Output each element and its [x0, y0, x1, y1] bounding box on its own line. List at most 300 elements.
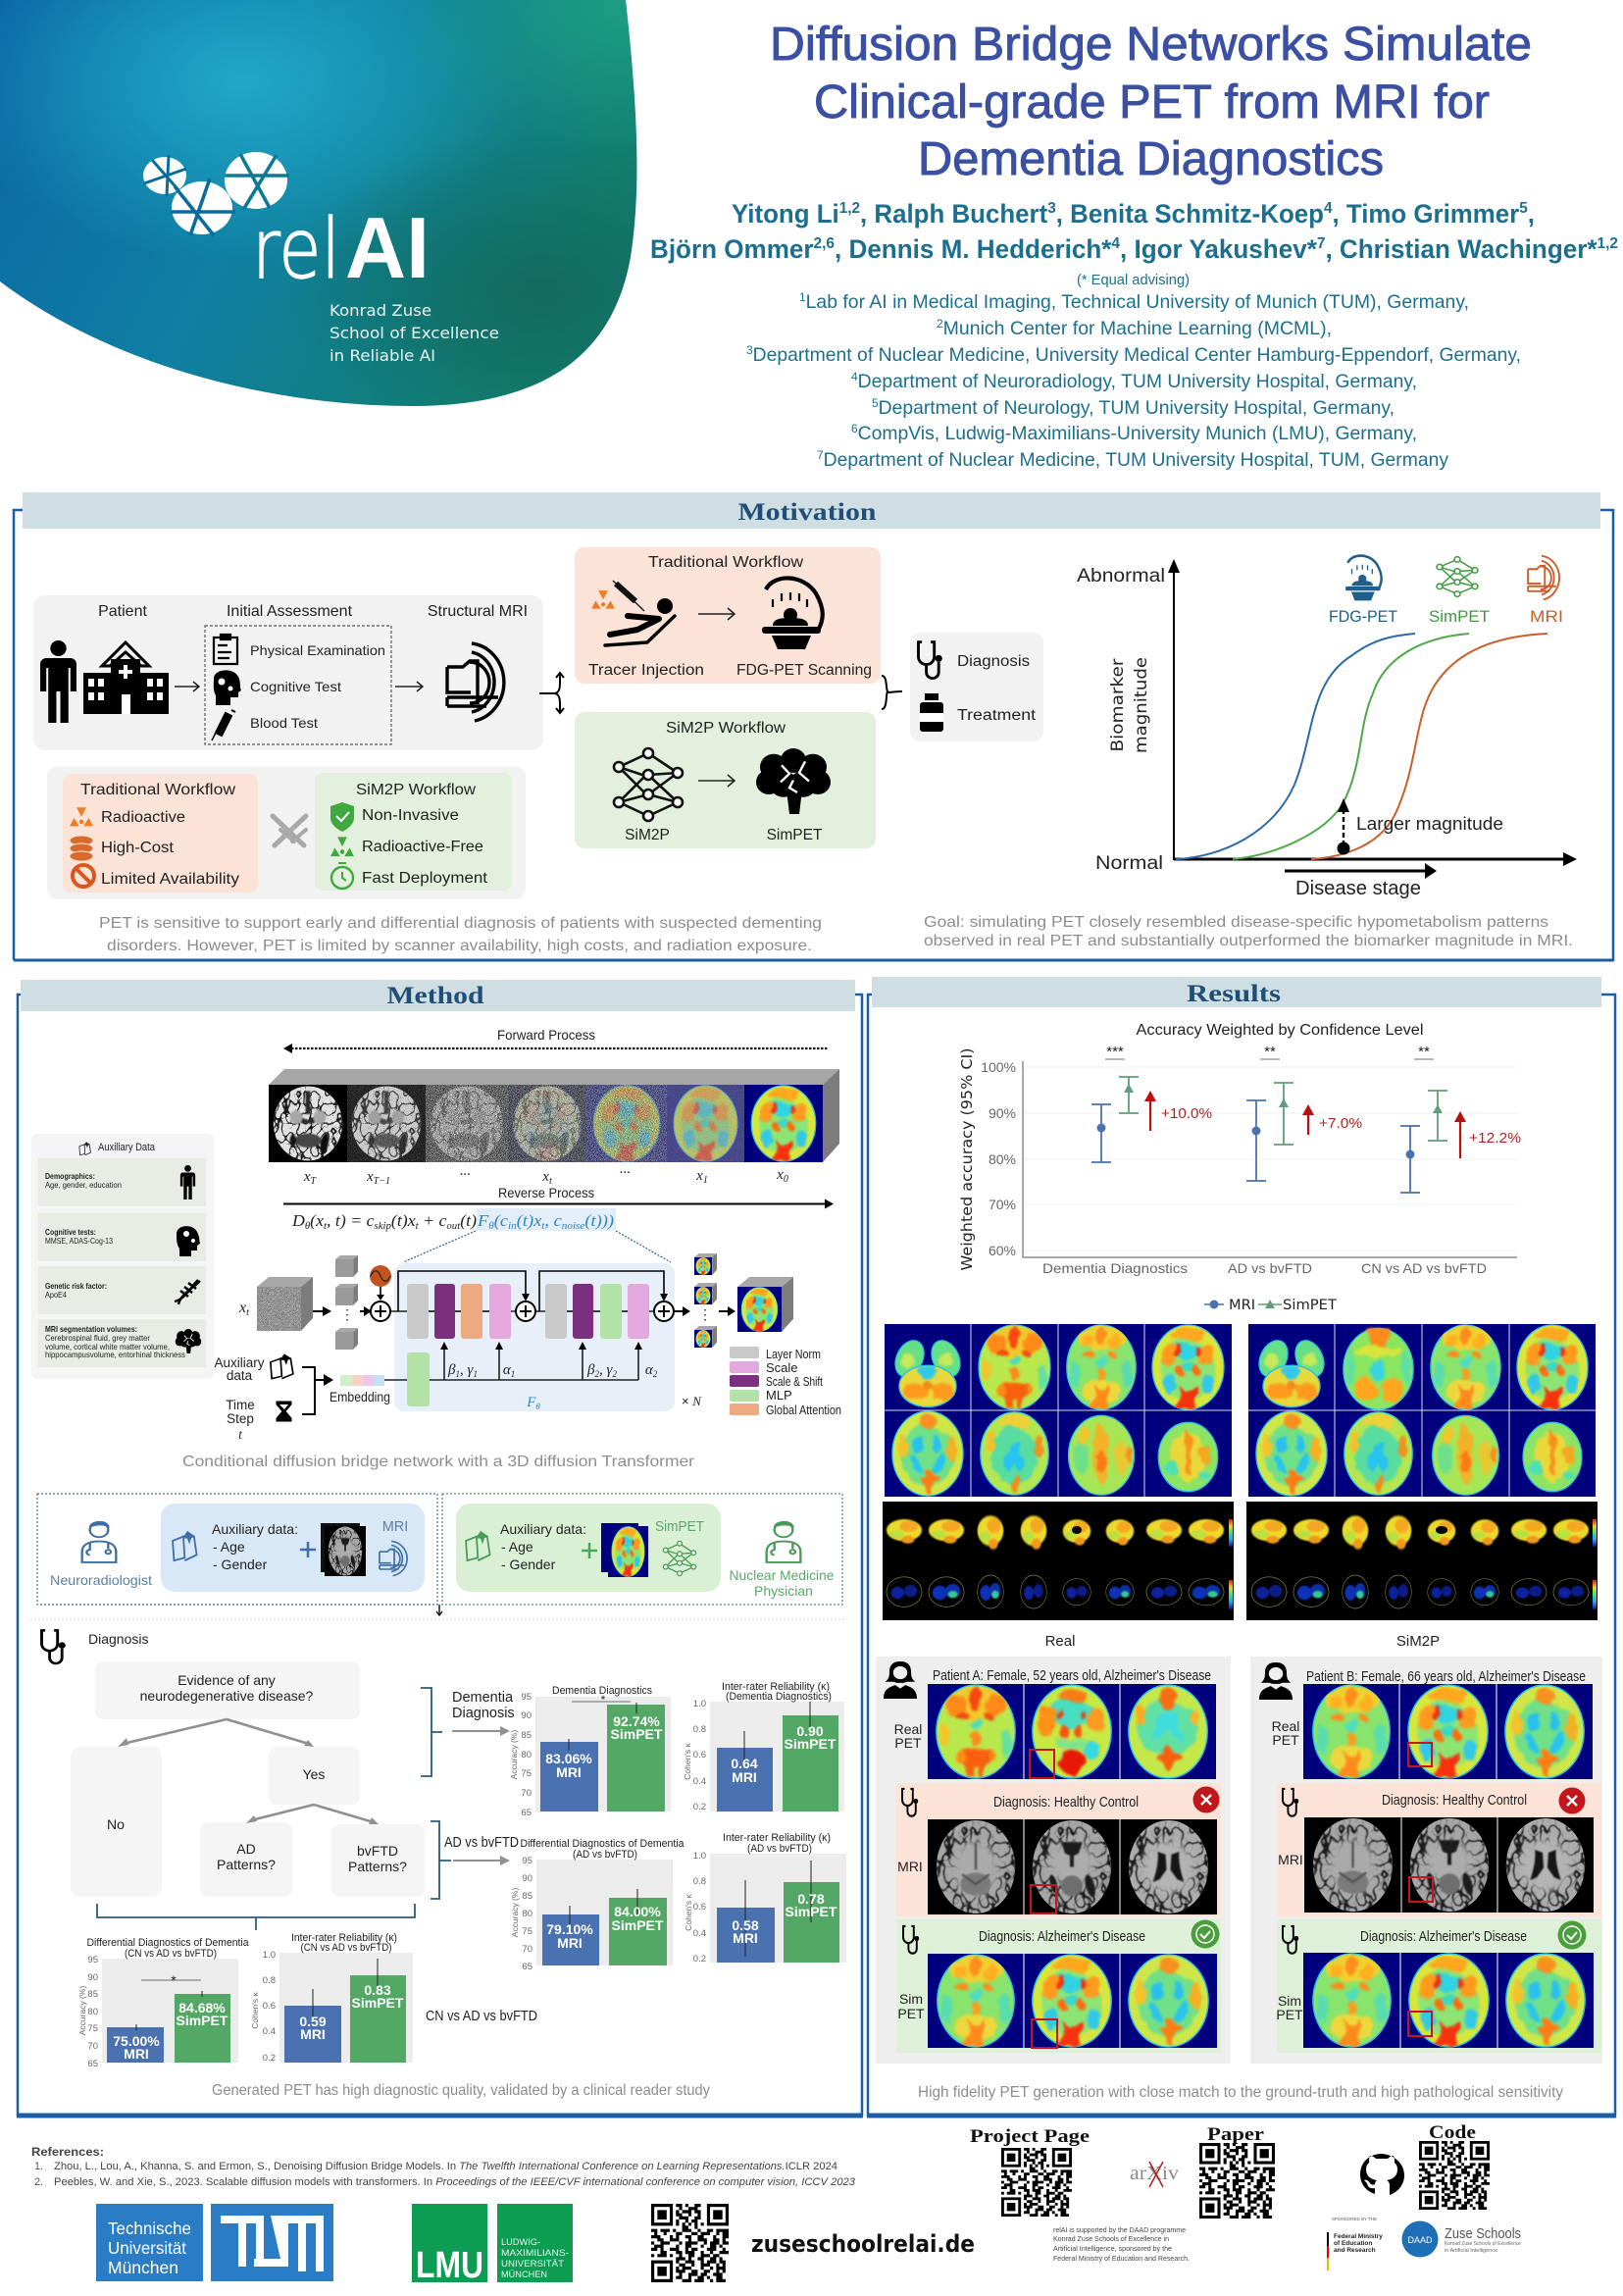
time step input: Step	[227, 1411, 254, 1426]
equation: out	[446, 1221, 460, 1232]
chart: dementia diagnostics reliability: 0.90	[796, 1723, 824, 1739]
step labels: 1	[703, 1175, 708, 1186]
legend: SimPET: SimPET	[1429, 608, 1490, 626]
diagnosis and treatment box: Treatment	[957, 707, 1037, 724]
chart: dementia diagnostics accuracy: 80	[521, 1750, 532, 1760]
authors: , Timo Grimmer	[1332, 199, 1520, 229]
chart: AD vs bvFTD accuracy: 75	[522, 1926, 533, 1937]
arrow	[436, 1605, 442, 1615]
chart: CN vs AD vs bvFTD accuracy: 80	[87, 2007, 98, 2017]
reader study: neuroradiologist: Auxiliary data:	[212, 1521, 298, 1537]
authors: , Christian Wachinger*	[1325, 234, 1598, 264]
chart: AD vs bvFTD accuracy: Differential Diagnostics of Dementia	[520, 1838, 685, 1850]
authors: , Ralph Buchert	[860, 199, 1047, 229]
affiliations: 7	[817, 448, 824, 462]
row: genetic risk factor: Genetic risk factor:	[45, 1281, 107, 1291]
step labels: x	[367, 1169, 374, 1185]
authors: 2,6	[814, 235, 835, 252]
parameter labels: β	[448, 1362, 456, 1378]
step labels: t	[549, 1176, 552, 1187]
chart: dementia diagnostics accuracy: *	[601, 1693, 606, 1707]
authors: 7	[1317, 235, 1326, 252]
chart: AD vs bvFTD accuracy	[510, 1838, 685, 1972]
SimPET row: PET	[1276, 2007, 1303, 2022]
panel: method	[17, 980, 863, 2117]
logo subtitle	[330, 301, 499, 365]
title: Dementia Diagnostics	[918, 133, 1384, 185]
row: demographics: Demographics:	[45, 1171, 95, 1181]
decision flow: Patterns?	[348, 1859, 407, 1874]
chart: CN vs AD vs bvFTD reliability: 1.0	[263, 1950, 276, 1961]
logo: LMU: MÜNCHEN	[501, 2270, 547, 2280]
traditional workflow box: FDG-PET Scanning	[736, 662, 872, 679]
logo: TUM: Universität	[108, 2238, 186, 2258]
equation: (t)x	[517, 1211, 542, 1230]
logo wordmark: AI	[345, 199, 430, 296]
SiM2P workflow box: SimPET	[767, 827, 823, 843]
chart: dementia diagnostics accuracy: MRI	[556, 1764, 582, 1780]
caption: motivation right	[924, 914, 1573, 949]
chart: dementia diagnostics accuracy: Dementia Diagnostics	[552, 1685, 652, 1697]
chart: accuracy weighted by confidence: Weighted accuracy (95% CI)	[958, 1047, 976, 1271]
chart: dementia diagnostics accuracy: 75	[521, 1768, 532, 1779]
logo panel: relAI gradient blob	[0, 0, 636, 406]
brace: CN vs AD vs bvFTD	[97, 1904, 415, 1930]
significance markers	[1105, 1044, 1434, 1060]
sponsor statement	[1053, 2225, 1190, 2263]
chart: dementia diagnostics reliability: Cohen's κ	[683, 1742, 692, 1780]
affiliations: Department of Nuclear Medicine, University Medical Center Hamburg-Eppendorf, Germany,	[753, 344, 1521, 366]
row: MRI segmentation volumes: MRI segmentation volumes:	[45, 1324, 137, 1334]
equation: F	[478, 1211, 487, 1230]
title	[770, 19, 1532, 185]
authors: 4	[1324, 200, 1333, 217]
affiliations: Department of Nuclear Medicine, TUM University Hospital, TUM, Germany	[824, 449, 1448, 471]
decision flow: Evidence of any	[178, 1672, 276, 1688]
diagnostic pathway box	[33, 595, 543, 750]
traditional workflow box	[575, 547, 881, 684]
chart: accuracy weighted by confidence: 90%	[989, 1105, 1016, 1121]
chart: AD vs bvFTD reliability: 0.78	[797, 1891, 825, 1907]
branching arrow	[539, 673, 564, 713]
logo: federal ministry: of Education	[1334, 2240, 1372, 2247]
decision flow: Patterns?	[217, 1857, 276, 1872]
chart: CN vs AD vs bvFTD reliability: 0.8	[263, 1975, 276, 1986]
chart: AD vs bvFTD reliability: MRI	[733, 1930, 758, 1946]
parameter labels: α	[503, 1362, 511, 1378]
arrow	[395, 682, 423, 691]
MRI row: MRI	[897, 1859, 923, 1874]
authors: Yitong Li	[732, 199, 843, 229]
embedding: Embedding	[330, 1390, 390, 1404]
chart: biomarker trajectories: Biomarker	[1108, 658, 1127, 751]
parameter labels: 2	[612, 1369, 617, 1379]
decision flow: neurodegenerative disease?	[140, 1688, 314, 1704]
heading: results: Results	[1187, 981, 1281, 1007]
chart: AD vs bvFTD reliability: 1.0	[693, 1851, 706, 1862]
real PET row	[1272, 1684, 1593, 1779]
transformer diagram	[214, 1253, 841, 1442]
MRI row: MRI	[1278, 1852, 1303, 1867]
icon: tracer injection	[591, 581, 675, 645]
chart: biomarker trajectories: Normal	[1095, 853, 1163, 874]
diffusion image stack	[269, 1069, 839, 1162]
chart: AD vs bvFTD reliability: Inter-rater Reliability (κ)	[723, 1832, 831, 1844]
output patches	[694, 1253, 717, 1348]
reader study: neuroradiologist: - Gender	[213, 1556, 268, 1572]
heading: motivation	[23, 492, 1600, 529]
references: Peebles, W. and Xie, S., 2023. Scalable diffusion models with transformers. In Proceedings of the IEEE/CVF international conference on computer vision, ICCV 2023	[54, 2176, 856, 2188]
decision flow: bvFTD	[357, 1843, 398, 1859]
authors: 3	[1047, 200, 1056, 217]
code link	[1360, 2122, 1490, 2209]
chart: dementia diagnostics reliability	[683, 1681, 844, 1812]
chart: accuracy weighted by confidence: +7.0%	[1319, 1115, 1362, 1132]
logo: LMU: LMU	[416, 2245, 483, 2286]
chart: accuracy weighted by confidence: AD vs bvFTD	[1228, 1260, 1312, 1276]
chart: dementia diagnostics accuracy: 70	[521, 1788, 532, 1799]
equation: t	[416, 1221, 419, 1232]
equation	[291, 1208, 616, 1232]
chart: CN vs AD vs bvFTD accuracy: Accuracy (%)	[77, 1986, 87, 2035]
panel: motivation	[14, 492, 1613, 960]
icon: clipboard	[214, 635, 237, 664]
reverse process	[283, 1185, 834, 1208]
chart: CN vs AD vs bvFTD accuracy: 65	[87, 2059, 98, 2069]
chart: dementia diagnostics accuracy: 90	[521, 1710, 532, 1721]
parameter labels: 1	[473, 1369, 478, 1379]
SiM2P workflow box: SiM2P	[625, 827, 670, 843]
chart: CN vs AD vs bvFTD accuracy: 70	[87, 2041, 98, 2052]
chart: CN vs AD vs bvFTD reliability: 0.2	[263, 2053, 276, 2064]
icon: network	[614, 748, 683, 821]
chart: CN vs AD vs bvFTD accuracy: (CN vs AD vs bvFTD)	[125, 1948, 217, 1960]
chart: AD vs bvFTD reliability: 0.2	[693, 1954, 706, 1964]
assessment box: Cognitive Test	[250, 679, 341, 694]
logo: federal ministry: and Research	[1334, 2247, 1376, 2254]
parameter labels: θ	[535, 1402, 540, 1411]
output patches: ⋮	[698, 1306, 712, 1322]
logo: TUM	[96, 2204, 333, 2281]
reader study: nuclear medicine physician: Physician	[754, 1583, 813, 1599]
chart: AD vs bvFTD accuracy: 85	[522, 1891, 533, 1902]
significance markers: **	[1264, 1044, 1276, 1060]
surface renders: real	[883, 1502, 1234, 1620]
auxiliary data input: Auxiliary	[214, 1355, 265, 1370]
logo: DAAD Zuse Schools: in Artificial Intelligence	[1445, 2248, 1497, 2254]
traditional drawbacks: High-Cost	[101, 840, 175, 856]
time step input	[226, 1398, 291, 1442]
logo: DAAD Zuse Schools: Zuse Schools	[1445, 2226, 1521, 2242]
reader study: nuclear medicine physician: Auxiliary data:	[500, 1521, 586, 1537]
parameter labels: × N	[682, 1394, 702, 1408]
chart: AD vs bvFTD accuracy: SimPET	[612, 1917, 664, 1933]
legend: Scale & Shift	[766, 1374, 823, 1389]
legend: FDG-PET	[1329, 556, 1397, 626]
legend: MRI	[1528, 556, 1563, 626]
chart: CN vs AD vs bvFTD accuracy: 84.68%	[178, 2000, 226, 2015]
code link: Code	[1429, 2122, 1476, 2143]
logo: DAAD Zuse Schools: Konrad Zuse Schools of Excellence	[1445, 2241, 1521, 2247]
chart: CN vs AD vs bvFTD reliability	[250, 1932, 413, 2064]
logo wordmark: rel	[252, 201, 340, 297]
input cube: x	[239, 1300, 246, 1316]
SimPET row: Sim	[1278, 1993, 1301, 2009]
title: Clinical-grade PET from MRI for	[814, 77, 1490, 128]
chart: AD vs bvFTD accuracy: 70	[522, 1944, 533, 1955]
row: MRI segmentation volumes: volume, cortical white matter volume,	[45, 1342, 170, 1352]
chart: accuracy weighted by confidence: 100%	[981, 1059, 1016, 1075]
chart: CN vs AD vs bvFTD accuracy: 90	[87, 1972, 98, 1983]
authors: ,	[1528, 199, 1535, 229]
equation: D	[292, 1211, 304, 1230]
label: dementia diagnosis: Diagnosis	[452, 1706, 515, 1721]
reader study: nuclear medicine physician: SimPET	[655, 1519, 704, 1535]
caption: reader study: Generated PET has high diagnostic quality, validated by a clinical reader study	[212, 2082, 710, 2099]
chart: AD vs bvFTD reliability: 0.8	[693, 1876, 706, 1887]
patient A panel: Patient A: Female, 52 years old, Alzheimer's Disease	[933, 1668, 1211, 1684]
step labels: T−1	[374, 1176, 390, 1187]
row: MRI segmentation volumes	[38, 1319, 206, 1367]
label: dementia diagnosis: Dementia	[452, 1690, 514, 1706]
SiM2P benefits: SiM2P Workflow	[356, 782, 476, 798]
chart: dementia diagnostics reliability: 0.8	[693, 1724, 706, 1735]
legend: MLP	[766, 1388, 792, 1403]
row: MRI segmentation volumes: hippocampusvolume, entorhinal thickness	[45, 1350, 185, 1359]
reverse process: Reverse Process	[498, 1185, 594, 1200]
chart: dementia diagnostics reliability: 0.6	[693, 1750, 706, 1760]
caption: motivation left: PET is sensitive to support early and differential diagnosis of patients with suspected dementing	[99, 915, 822, 932]
legend: Layer Norm	[766, 1347, 821, 1361]
PET grid: SiM2P	[1248, 1324, 1596, 1497]
diagnostic pathway box: Initial Assessment	[227, 603, 353, 620]
label: CN vs AD vs bvFTD: CN vs AD vs bvFTD	[426, 2009, 537, 2024]
input cube	[238, 1277, 313, 1331]
auxiliary data panel: Auxiliary Data	[98, 1142, 156, 1153]
authors: , Dennis M. Hedderich*	[835, 234, 1112, 264]
time step input: Time	[226, 1398, 255, 1412]
paper link	[1130, 2124, 1275, 2217]
chart: CN vs AD vs bvFTD reliability: MRI	[300, 2026, 326, 2042]
chart: dementia diagnostics accuracy: Accuracy (%)	[509, 1730, 519, 1779]
embedding	[330, 1375, 390, 1404]
equation: (t)	[460, 1211, 477, 1230]
equation: (t)))	[584, 1211, 614, 1230]
chart: dementia diagnostics accuracy: 85	[521, 1730, 532, 1741]
comparison box	[47, 767, 526, 899]
auxiliary data input	[214, 1353, 293, 1383]
traditional drawbacks: Traditional Workflow	[80, 782, 235, 798]
assessment box: Blood Test	[250, 715, 318, 731]
logo subtitle: School of Excellence	[330, 324, 499, 342]
real PET row: Real	[1272, 1718, 1299, 1734]
forward process	[283, 1027, 828, 1053]
chart: dementia diagnostics accuracy: SimPET	[611, 1726, 663, 1742]
SiM2P benefits: Radioactive-Free	[362, 839, 483, 855]
SimPET row: PET	[897, 2006, 925, 2021]
chart: dementia diagnostics accuracy: 83.06%	[545, 1751, 592, 1766]
sponsor statement: Konrad Zuse Schools of Excellence in	[1053, 2234, 1169, 2243]
logo: LMU: UNIVERSITÄT	[501, 2259, 564, 2270]
parameter labels: F	[527, 1395, 535, 1410]
equation: (c	[494, 1211, 509, 1230]
parameter labels: 2	[595, 1369, 600, 1379]
chart: dementia diagnostics reliability: Inter-rater Reliability (κ)	[722, 1681, 830, 1693]
caption: motivation right: Goal: simulating PET closely resembled disease-specific hypometabolism patterns	[924, 914, 1548, 931]
MRI error bars	[1091, 1100, 1420, 1193]
authors: 1,2	[839, 200, 860, 217]
row: genetic risk factor: ApoE4	[45, 1290, 67, 1300]
heading: method	[21, 980, 855, 1011]
SimPET row: Sim	[899, 1991, 923, 2007]
chart: AD vs bvFTD accuracy: Accuracy (%)	[510, 1888, 520, 1937]
caption: motivation left: disorders. However, PET is limited by scanner availability, high costs, and radiation exposure.	[107, 938, 812, 954]
label: AD vs bvFTD: AD vs bvFTD	[444, 1835, 519, 1851]
MRI row: Diagnosis: Healthy Control	[993, 1795, 1139, 1811]
reader study: neuroradiologist: - Age	[213, 1539, 245, 1555]
diagnostic pathway box: Patient	[98, 603, 147, 620]
MRI row: Diagnosis: Healthy Control	[1382, 1793, 1527, 1809]
diagnostic pathway box: Structural MRI	[428, 603, 528, 620]
chart: AD vs bvFTD reliability	[684, 1832, 846, 1964]
heading: results	[872, 977, 1601, 1007]
paper link: arXiv	[1130, 2163, 1179, 2184]
SimPET row	[896, 1919, 1221, 2053]
real PET row: PET	[894, 1735, 922, 1751]
auxiliary data input: data	[227, 1368, 253, 1383]
chart: AD vs bvFTD reliability: (AD vs bvFTD)	[747, 1843, 812, 1855]
SiM2P benefits: Fast Deployment	[362, 870, 488, 887]
step labels: ···	[459, 1167, 471, 1183]
transformer blocks	[407, 1284, 649, 1339]
chart: AD vs bvFTD reliability: 0.6	[693, 1902, 706, 1913]
parameter labels: 1	[511, 1369, 515, 1379]
time step input: t	[238, 1427, 243, 1442]
assessment box: Physical Examination	[250, 642, 385, 658]
heading: motivation: Motivation	[737, 499, 877, 526]
chart: CN vs AD vs bvFTD reliability: 0.59	[299, 2014, 327, 2029]
equation: (x	[310, 1211, 325, 1230]
chart: AD vs bvFTD accuracy: 80	[522, 1909, 533, 1919]
real PET row: PET	[1272, 1732, 1299, 1748]
MRI row	[896, 1783, 1221, 1916]
patient B panel	[1250, 1657, 1602, 2064]
arrow	[698, 608, 735, 620]
parameter labels	[447, 1362, 702, 1411]
label: dementia diagnosis	[452, 1690, 515, 1736]
chart: dementia diagnostics reliability: 0.4	[693, 1776, 706, 1787]
equation: in	[508, 1221, 517, 1232]
legend: MRI	[1229, 1298, 1255, 1313]
label: AD vs bvFTD	[444, 1835, 519, 1865]
caption: results: High fidelity PET generation with close match to the ground-truth and high pathological sensitivity	[918, 2084, 1563, 2101]
PET grid: real	[885, 1324, 1232, 1497]
logo mark: three segmented circles	[143, 152, 289, 235]
traditional workflow box: Traditional Workflow	[648, 554, 803, 571]
QR code: relAI website	[651, 2206, 729, 2280]
chart: dementia diagnostics accuracy: 95	[521, 1692, 532, 1703]
parameter labels: β	[587, 1362, 595, 1378]
paper link: Paper	[1207, 2124, 1265, 2145]
project page link: Project Page	[970, 2126, 1090, 2147]
chart: CN vs AD vs bvFTD accuracy	[77, 1937, 249, 2069]
affiliations: CompVis, Ludwig-Maximilians-University Munich (LMU), Germany,	[858, 423, 1417, 444]
authors: 1,2	[1598, 235, 1618, 252]
icon: head with gears	[214, 670, 241, 705]
icon: PET scanner	[762, 578, 823, 649]
brace: dementia diagnosis	[421, 1688, 442, 1776]
output cube	[737, 1277, 793, 1332]
significance markers: **	[1418, 1044, 1430, 1060]
logo subtitle: in Reliable AI	[330, 346, 435, 365]
SiM2P benefits	[315, 773, 512, 891]
title: Diffusion Bridge Networks Simulate	[770, 19, 1532, 71]
equation: t	[324, 1221, 327, 1232]
chart: accuracy weighted by confidence: Dementia Diagnostics	[1042, 1260, 1188, 1276]
step labels: 0	[784, 1174, 788, 1185]
step labels: ···	[619, 1165, 631, 1181]
sponsor statement: Federal Ministry of Education and Research.	[1053, 2254, 1190, 2263]
reader study: nuclear medicine physician: Nuclear Medicine	[730, 1567, 835, 1583]
legend	[730, 1347, 841, 1417]
chart: biomarker trajectories	[1077, 556, 1577, 899]
patch cubes	[335, 1255, 358, 1350]
traditional drawbacks	[63, 774, 258, 893]
icon: brain	[756, 748, 831, 814]
arrow	[175, 682, 199, 691]
chart: AD vs bvFTD reliability: Cohen's κ	[684, 1893, 693, 1931]
icon: stethoscope	[918, 642, 942, 679]
chart: accuracy weighted by confidence	[958, 1022, 1521, 1313]
chart: accuracy weighted by confidence: +12.2%	[1469, 1130, 1521, 1147]
merging brace	[882, 676, 902, 709]
affiliations: 3	[746, 343, 753, 357]
legend: Scale	[766, 1360, 798, 1375]
chart: biomarker trajectories: Larger magnitude	[1356, 814, 1503, 834]
chart: accuracy weighted by confidence: 70%	[989, 1197, 1016, 1212]
authors	[650, 199, 1618, 264]
row: demographics	[38, 1158, 206, 1206]
chart: dementia diagnostics reliability: 0.2	[693, 1802, 706, 1812]
logo: LMU: MAXIMILIANS-	[501, 2248, 569, 2259]
chart: AD vs bvFTD reliability: 0.58	[732, 1917, 759, 1933]
chart: CN vs AD vs bvFTD accuracy: *	[171, 1972, 177, 1988]
traditional drawbacks: Limited Availability	[101, 871, 239, 888]
chart: CN vs AD vs bvFTD accuracy: MRI	[124, 2046, 149, 2062]
SimPET row: Diagnosis: Alzheimer's Disease	[979, 1929, 1145, 1945]
chart: dementia diagnostics accuracy	[509, 1685, 671, 1818]
equation: , c	[544, 1211, 563, 1230]
affiliations	[746, 272, 1521, 471]
chart: dementia diagnostics reliability: SimPET	[785, 1736, 837, 1752]
chart: AD vs bvFTD accuracy: 95	[522, 1856, 533, 1866]
authors: 4	[1111, 235, 1120, 252]
reader study: nuclear medicine physician: - Age	[501, 1539, 533, 1555]
label: SiM2P: SiM2P	[1396, 1633, 1440, 1650]
sponsor statement: relAI is supported by the DAAD programme	[1053, 2225, 1186, 2234]
chart: CN vs AD vs bvFTD reliability: 0.4	[263, 2026, 276, 2037]
reader study: nuclear medicine physician: - Gender	[501, 1556, 556, 1572]
chart: AD vs bvFTD accuracy: 79.10%	[546, 1921, 593, 1937]
icon: medicine bottle	[920, 693, 943, 732]
step labels: T	[311, 1176, 318, 1187]
parameter labels: , γ	[460, 1362, 475, 1378]
equation: , t) = c	[327, 1211, 375, 1230]
chart: dementia diagnostics reliability: MRI	[732, 1769, 757, 1785]
chart: AD vs bvFTD accuracy: (AD vs bvFTD)	[573, 1849, 637, 1861]
patient A panel	[876, 1657, 1231, 2064]
chart: CN vs AD vs bvFTD reliability: (CN vs AD vs bvFTD)	[300, 1942, 392, 1954]
